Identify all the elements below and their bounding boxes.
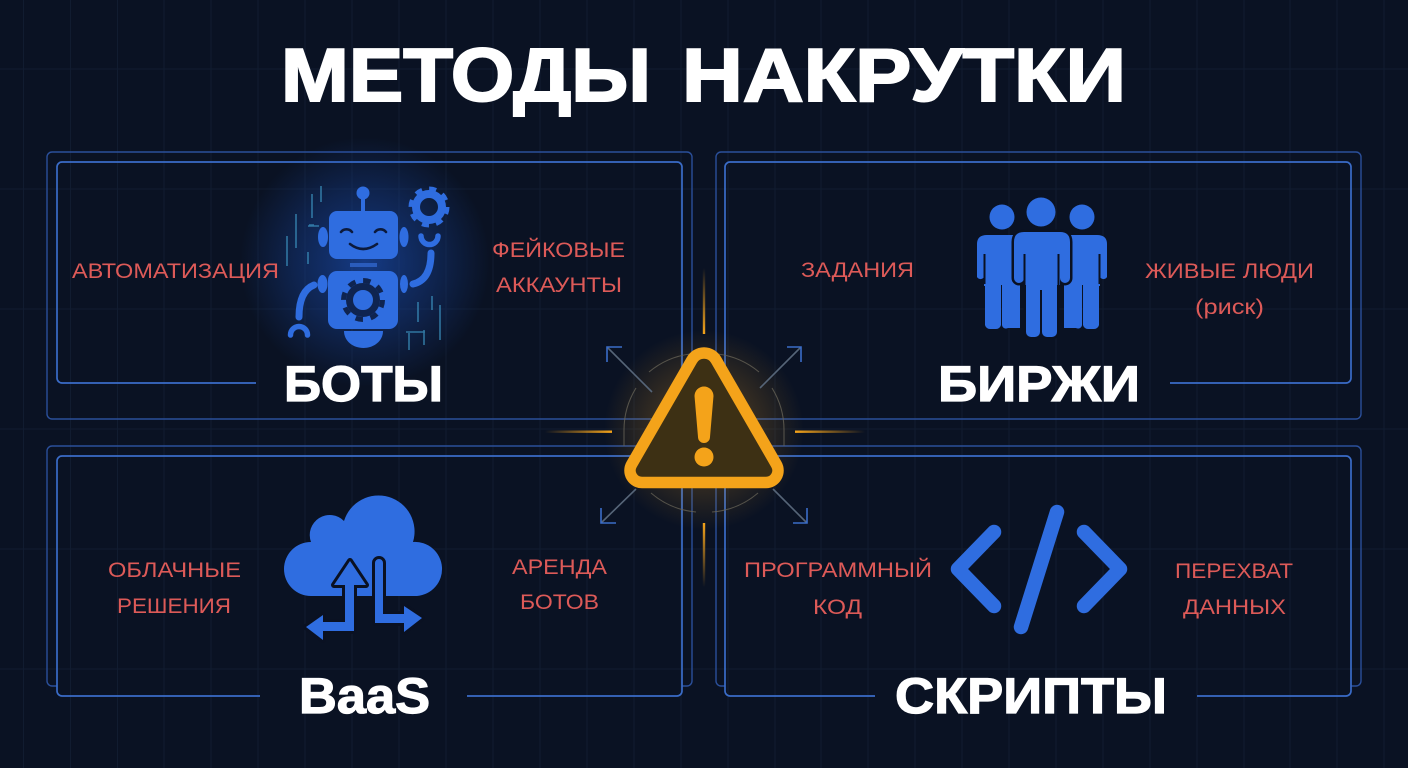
label: фейковые аккаунты: АККАУНТЫ (496, 274, 622, 297)
hand gear (411, 189, 447, 225)
label: программный код: КОД (813, 596, 862, 619)
label: перехват данных: ДАННЫХ (1183, 596, 1286, 619)
icon: code (958, 512, 1120, 627)
label: перехват данных (1175, 560, 1293, 619)
title: НАКРУТКИ (682, 33, 1126, 117)
label: живые люди: ЖИВЫЕ ЛЮДИ (1145, 260, 1314, 283)
heading: биржи: БИРЖИ (938, 356, 1140, 412)
title: МЕТОДЫ (281, 33, 651, 117)
label: задания: ЗАДАНИЯ (801, 259, 914, 282)
label: аренда ботов (512, 556, 607, 614)
heading: боты: БОТЫ (284, 356, 443, 412)
label: программный код (744, 558, 932, 619)
label: живые люди (1145, 260, 1314, 319)
panel: скрипты (716, 446, 1361, 724)
title (281, 33, 1126, 117)
label: фейковые аккаунты (492, 238, 625, 297)
heading: скрипты: СКРИПТЫ (895, 668, 1167, 724)
label: фейковые аккаунты: ФЕЙКОВЫЕ (492, 238, 625, 262)
label: аренда ботов: БОТОВ (520, 591, 599, 614)
icon: cloud (284, 495, 442, 640)
body gear (344, 280, 382, 320)
center warning (545, 268, 865, 587)
rays (545, 268, 865, 587)
label: облачные решения: ОБЛАЧНЫЕ (108, 559, 241, 582)
label: программный код: ПРОГРАММНЫЙ (744, 558, 932, 582)
icon: warning triangle (630, 353, 778, 482)
label: перехват данных: ПЕРЕХВАТ (1175, 560, 1293, 583)
label: облачные решения (108, 559, 241, 618)
label: облачные решения: РЕШЕНИЯ (117, 595, 231, 618)
panel: baas (47, 446, 692, 724)
panel: боты (47, 137, 692, 456)
panel: биржи (692, 152, 1361, 456)
icon: people (977, 198, 1107, 337)
icon: robot (240, 137, 490, 387)
arrows (601, 347, 807, 523)
label: аренда ботов: АРЕНДА (512, 556, 607, 579)
heading: baas: BaaS (299, 668, 430, 724)
label: живые люди: (риск) (1195, 296, 1264, 319)
label: автоматизация: АВТОМАТИЗАЦИЯ (72, 260, 279, 283)
